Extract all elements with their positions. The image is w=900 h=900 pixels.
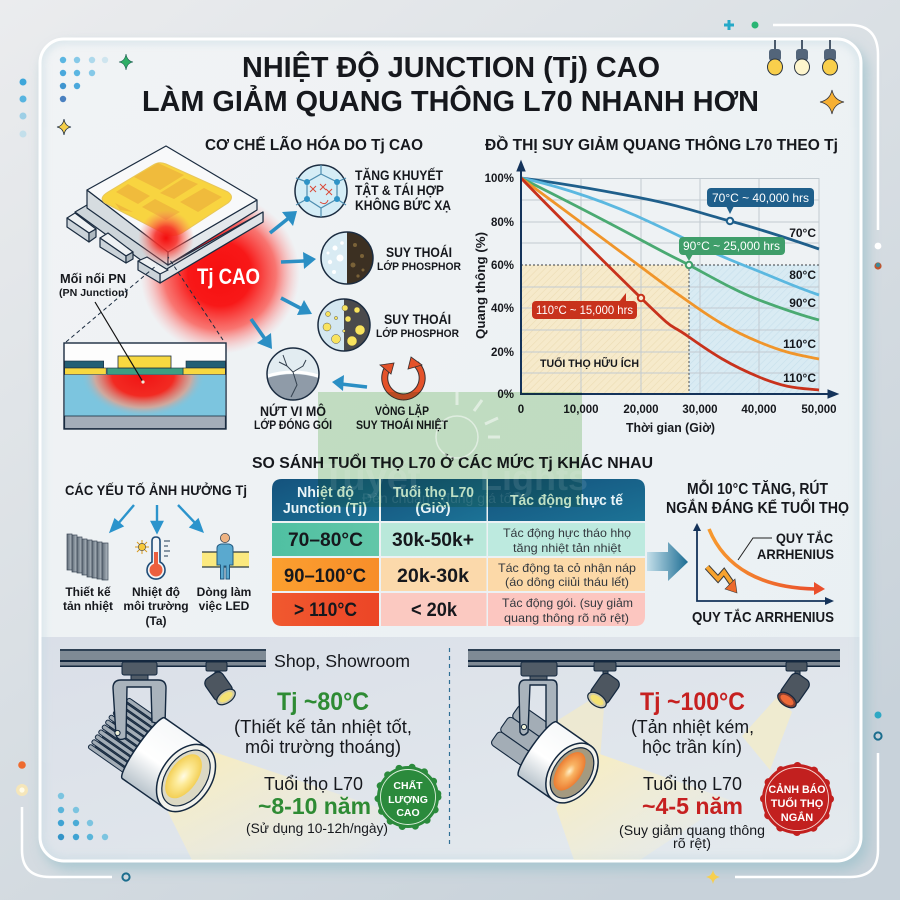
- table row: 70–80°C: [272, 523, 645, 556]
- curve labels: 70°C: [789, 226, 816, 240]
- text: micro crack: [254, 404, 332, 432]
- watermark: Tuyết: [322, 457, 421, 499]
- text: L70 lifetime poor: Tuổi thọ L70: [643, 774, 742, 794]
- labels: factors: môi trường: [123, 599, 189, 613]
- callout: 90°C: 90°C ~ 25,000 hrs: [683, 239, 780, 253]
- text: thermal degradation loop: [356, 405, 448, 432]
- curve labels: 80°C: [789, 268, 816, 282]
- y axis labels: 40%: [491, 303, 514, 315]
- text: Tj 80°C: [234, 688, 412, 757]
- track rail: [60, 649, 266, 667]
- chart: L70 lumen depreciation: Thời gian (Giờ): [626, 420, 715, 435]
- glow: Tj hot zone: [140, 194, 300, 354]
- panel: good thermal design case: [60, 649, 439, 860]
- y axis labels: 60%: [491, 260, 514, 272]
- panel: poor thermal design case: [468, 649, 840, 860]
- table row: 90–100°C: Tác động ta cỏ nhận náp: [498, 561, 636, 575]
- curve labels: 110°C: [783, 337, 816, 351]
- x axis labels: 30,000: [682, 404, 718, 416]
- label: Tj CAO: Tj CAO: [197, 264, 260, 289]
- text: micro crack: NỨT VI MÔ: [260, 404, 326, 419]
- label: Arrhenius rule: QUY TẮC ARRHENIUS: [692, 608, 834, 626]
- text: L70 lifetime poor: [619, 774, 765, 851]
- x axis labels: 0: [518, 404, 524, 416]
- heading: factors: CÁC YẾU TỐ ẢNH HƯỞNG Tj: [65, 481, 247, 498]
- table: L70 by Tj: [272, 479, 645, 626]
- icon: yellow sparkle: [57, 119, 71, 135]
- panel: factors affecting Tj: [63, 481, 251, 628]
- labels: factors: việc LED: [199, 599, 250, 613]
- title: [142, 50, 759, 118]
- label: PN junction: [59, 272, 128, 299]
- heading: Arrhenius: [666, 480, 849, 517]
- text: defect recombination: TẬT & TÁI HỢP: [355, 183, 444, 198]
- text: defect recombination: KHÔNG BỨC XẠ: [355, 198, 451, 213]
- icon: thermometer: [135, 537, 170, 579]
- icon: zigzag drop arrow: [707, 567, 737, 593]
- labels: factors: (Ta): [145, 614, 167, 628]
- arrows: factors: [111, 505, 202, 532]
- badge: short life warning: [762, 764, 832, 834]
- badge: short life warning: CẢNH BÁO: [768, 783, 826, 796]
- arrows: effects of high Tj: [251, 211, 367, 391]
- y axis labels: 80%: [491, 217, 514, 229]
- callout: 110°C: [532, 293, 644, 319]
- text: micro crack: LỚP ĐÓNG GÓI: [254, 419, 332, 432]
- x axis labels: 50,000: [801, 404, 837, 416]
- table header: [272, 479, 645, 521]
- text: L70 lifetime good: ~8-10 năm: [258, 793, 371, 819]
- icon: orange sparkle: [820, 90, 844, 114]
- chart: L70 lumen depreciation: [473, 161, 838, 435]
- icon: phosphor degradation circle A: [321, 232, 373, 284]
- x axis labels: [518, 404, 837, 416]
- dots: bottom left decoration: [58, 793, 108, 840]
- badge: short life warning: NGẮN: [781, 811, 813, 824]
- diagram: junction cross-section: [64, 302, 226, 429]
- table row: above 110°C: quang thông rõ nõ rệt): [504, 611, 629, 625]
- x axis labels: 10,000: [563, 404, 599, 416]
- heading: Arrhenius: MỖI 10°C TĂNG, RÚT: [687, 480, 828, 498]
- icon: phosphor degradation circle B: [318, 299, 370, 351]
- label: Arrhenius rule in chart: QUY TẮC: [776, 529, 833, 546]
- icon: crystal defect circle: [295, 165, 347, 217]
- text: phosphor degradation A: LỚP PHOSPHOR: [377, 260, 461, 273]
- y axis labels: 100%: [485, 173, 514, 185]
- heading: L70 chart: ĐỒ THỊ SUY GIẢM QUANG THÔNG L70 THEO Tj: [485, 136, 838, 154]
- text: defect recombination: TĂNG KHUYẾT: [355, 168, 444, 183]
- icon: LED chip: [67, 146, 263, 283]
- text: Tj 100°C: hộc trần kín): [642, 737, 742, 757]
- track rail: [468, 649, 840, 667]
- y axis labels: 0%: [497, 389, 514, 401]
- curve labels: 90°C: [789, 296, 816, 310]
- panel: Arrhenius rule: [666, 480, 849, 626]
- badge: high quality: CAO: [396, 807, 420, 819]
- table header: Nhiệt độ: [297, 485, 354, 501]
- text: thermal degradation loop: SUY THOÁI NHIỆT: [356, 419, 448, 432]
- labels: factors: Thiết kế: [65, 585, 111, 599]
- curve labels: [783, 226, 816, 385]
- watermark: [318, 392, 588, 507]
- table row: 90–100°C: (áo dông ciiủi tháu lết): [505, 575, 629, 589]
- y axis labels: 20%: [491, 347, 514, 359]
- label: usage context: Shop, Showroom: [274, 651, 410, 671]
- table header: Tác động thực tế: [510, 493, 624, 509]
- table row: above 110°C: > 110°C: [294, 600, 357, 621]
- table row: 70–80°C: tăng nhiệt tản nhiệt: [513, 541, 622, 555]
- text: Tj 100°C: [631, 688, 754, 757]
- icon: heat sink: [67, 534, 108, 580]
- chart: Arrhenius curve: [693, 523, 834, 605]
- labels: factors: Nhiệt độ: [132, 585, 180, 599]
- curves: [521, 178, 819, 390]
- big spotlight: [88, 662, 228, 823]
- text: Tj 80°C: môi trường thoáng): [245, 737, 401, 757]
- icon: green sparkle: [119, 54, 133, 70]
- icon: LED drive current: [202, 533, 249, 579]
- light beams: [555, 697, 792, 860]
- text: L70 lifetime poor: rõ rệt): [673, 836, 711, 851]
- small spotlight: [202, 662, 238, 708]
- label: useful life: TUỔI THỌ HỮU ÍCH: [540, 357, 639, 370]
- text: L70 lifetime poor: (Suy giảm quang thông: [619, 823, 765, 838]
- text: L70 lifetime good: (Sử dụng 10-12h/ngày): [246, 821, 388, 836]
- glow: junction hot spot: [138, 210, 194, 266]
- small spotlight: warm: [585, 662, 622, 711]
- big spotlight: overheated: [490, 662, 609, 813]
- text: phosphor degradation B: SUY THOÁI: [384, 312, 451, 327]
- text: phosphor degradation A: SUY THOÁI: [386, 245, 452, 260]
- heading: Arrhenius: NGẮN ĐÁNG KỂ TUỔI THỌ: [666, 499, 849, 517]
- badge: high quality: [377, 766, 439, 828]
- heading: aging mechanism: CƠ CHẾ LÃO HÓA DO Tj CAO: [205, 136, 423, 154]
- badge: high quality: CHẤT: [393, 779, 423, 792]
- icon: thermal degradation loop: [380, 357, 422, 397]
- y axis labels: [485, 173, 514, 401]
- watermark: Đèn chuẩn - đúng giá tốt: [362, 490, 515, 506]
- x axis labels: 40,000: [741, 404, 777, 416]
- table row: 90–100°C: 20k-30k: [397, 566, 469, 587]
- callout: 70°C: 70°C ~ 40,000 hrs: [712, 191, 809, 205]
- text: phosphor degradation A: [377, 245, 461, 273]
- label: PN junction: Mối nối PN: [60, 272, 126, 286]
- text: Tj 80°C: Tj ~80°C: [277, 688, 369, 716]
- callout: 90°C: [679, 237, 785, 268]
- light beam: [168, 750, 380, 860]
- text: L70 lifetime poor: ~4-5 năm: [642, 793, 743, 819]
- icon: cracked encapsulation circle: [267, 348, 319, 400]
- callout: 70°C: [707, 188, 814, 224]
- x axis labels: 20,000: [623, 404, 659, 416]
- heading: L70 comparison: SO SÁNH TUỔI THỌ L70 Ở CÁC MỨC Tj KHÁC NHAU: [252, 453, 653, 472]
- text: defect recombination: [355, 168, 451, 213]
- table row: 90–100°C: 90–100°C: [284, 566, 366, 587]
- chip: die pads: [115, 163, 222, 220]
- text: phosphor degradation B: LỚP PHOSPHOR: [376, 327, 459, 340]
- axis titles: Quang thông (%): [473, 232, 488, 339]
- text: Tj 100°C: (Tản nhiệt kém,: [631, 717, 754, 737]
- small spotlight: overheated: [775, 662, 812, 711]
- table row: 90–100°C: [272, 558, 645, 591]
- table row: 70–80°C: 70–80°C: [288, 530, 363, 551]
- label: Arrhenius rule in chart: ARRHENIUS: [757, 546, 834, 562]
- text: phosphor degradation B: [376, 312, 459, 340]
- title: NHIỆT ĐỘ JUNCTION (Tj) CAO: [242, 50, 660, 84]
- table header: Junction (Tj): [283, 501, 367, 517]
- dots: top left decoration: [60, 57, 108, 102]
- text: L70 lifetime good: [246, 774, 388, 836]
- text: thermal degradation loop: VÒNG LẶP: [375, 405, 429, 418]
- title: LÀM GIẢM QUANG THÔNG L70 NHANH HƠN: [142, 84, 759, 118]
- table row: above 110°C: [272, 593, 645, 626]
- curve labels: 110°C: [783, 371, 816, 385]
- labels: factors: tản nhiệt: [63, 599, 113, 613]
- badge: short life warning: TUỔI THỌ: [771, 797, 824, 810]
- panel: aging mechanism diagram: [59, 146, 461, 432]
- arrow: table to Arrhenius: [647, 542, 688, 581]
- watermark: Lights: [480, 457, 588, 498]
- table row: above 110°C: Tác động gói. (suy giảm: [502, 596, 633, 610]
- axes: [517, 161, 838, 398]
- table header: Tuổi thọ L70: [393, 485, 474, 501]
- icon: hanging bulbs: [768, 40, 838, 75]
- label: PN junction: (PN Junction): [59, 287, 128, 299]
- divider: [448, 648, 450, 846]
- callout: 110°C: 110°C ~ 15,000 hrs: [536, 303, 633, 317]
- text: L70 lifetime good: Tuổi thọ L70: [264, 774, 363, 794]
- table header: (Giờ): [415, 501, 451, 517]
- dashed projection lines: [66, 257, 223, 342]
- labels: factors: Dòng làm: [197, 585, 251, 599]
- icon: bottom sparkle: [706, 870, 720, 884]
- labels: factors: [63, 585, 251, 628]
- label: Arrhenius rule in chart: [757, 529, 834, 562]
- badge: high quality: LƯỢNG: [388, 794, 428, 806]
- table row: 70–80°C: 30k-50k+: [392, 530, 474, 551]
- text: Tj 100°C: Tj ~100°C: [640, 688, 745, 716]
- table row: 70–80°C: Tác động hực tháo hhọ: [503, 526, 631, 540]
- text: Tj 80°C: (Thiết kế tản nhiệt tốt,: [234, 717, 412, 737]
- table row: above 110°C: < 20k: [411, 600, 457, 621]
